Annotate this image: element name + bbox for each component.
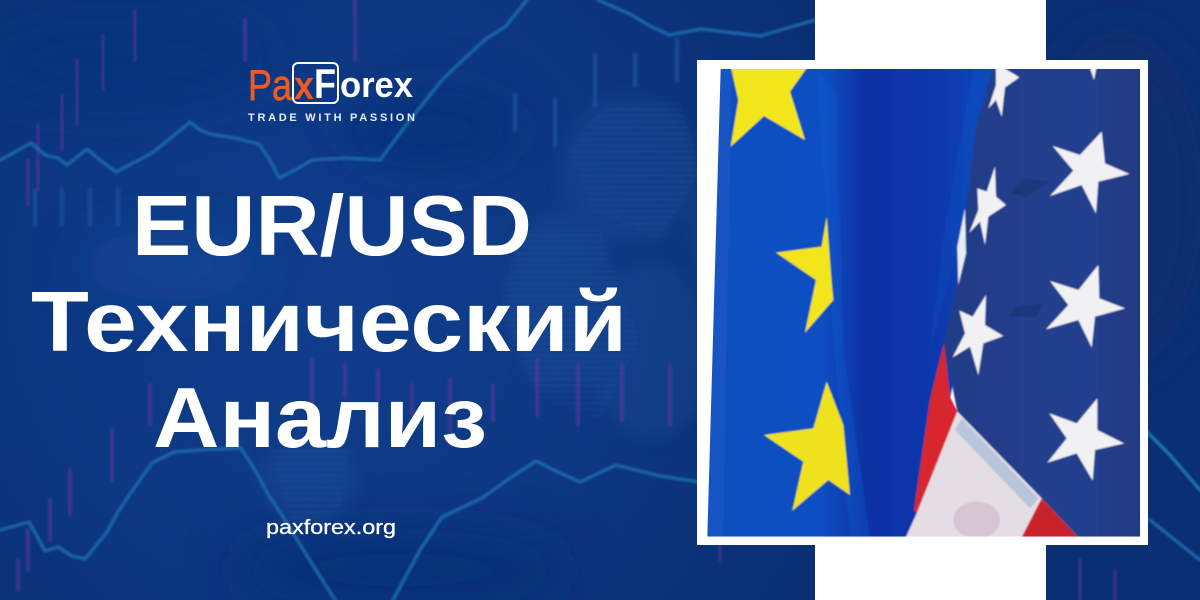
logo wordmark: x — [294, 64, 314, 108]
title line: Технический: Технический — [31, 275, 627, 370]
white vertical strip — [815, 0, 1046, 600]
photo frame: EU and US flags — [697, 60, 1150, 550]
flag photo — [707, 69, 1140, 537]
EU flag — [707, 69, 994, 537]
logo tagline: TRADE WITH PASSION — [248, 112, 415, 124]
website url: paxforex.org — [266, 517, 396, 539]
logo: PaxForex — [248, 60, 415, 124]
EU star bottom — [764, 382, 850, 511]
white frame — [697, 60, 1148, 545]
logo wordmark: orex — [340, 64, 413, 105]
US red stripes — [914, 343, 957, 513]
EU star middle — [776, 217, 833, 333]
US white stripe edge — [957, 208, 966, 285]
EU star top — [730, 63, 810, 147]
logo wordmark — [248, 60, 413, 110]
US flag — [904, 69, 1140, 537]
candlesticks: blue — [35, 40, 677, 225]
halftone world map — [260, 95, 810, 525]
logo wordmark: Pa — [248, 61, 292, 110]
title — [31, 179, 627, 466]
US stars — [953, 63, 1129, 481]
logo wordmark: F — [314, 60, 336, 107]
title line: Анализ: Анализ — [153, 371, 487, 466]
US white stripe — [904, 411, 1042, 537]
title line: EUR/USD: EUR/USD — [132, 179, 532, 274]
